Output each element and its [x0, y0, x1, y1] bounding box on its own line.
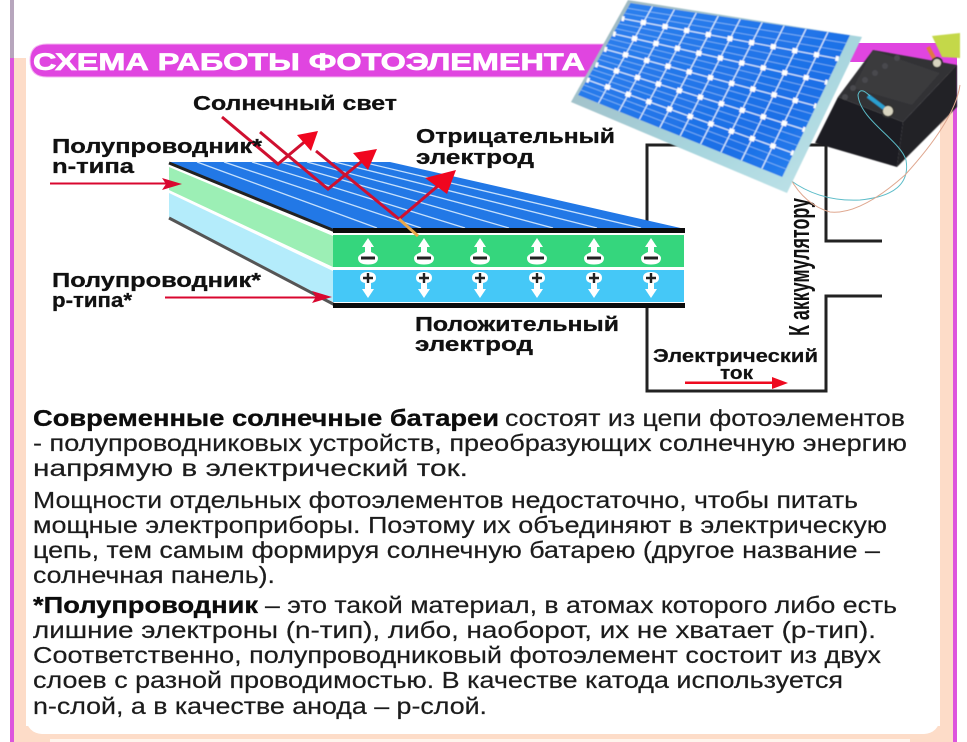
hole charges	[360, 272, 659, 298]
front n-layer	[333, 235, 684, 267]
arrow: n-type pointer	[50, 178, 182, 190]
diagram labels: р-типа*	[52, 290, 132, 312]
ray 3	[316, 151, 456, 236]
text block: modern solar batteries: состоят из цепи фотоэлементов	[505, 405, 905, 431]
cell junction dots	[587, 18, 839, 153]
battery front face	[815, 97, 903, 167]
text block: semiconductor definition: Соответственно, полупроводниковый фотоэлемент состоит из двух	[33, 642, 882, 668]
label: electric current	[653, 346, 818, 383]
diagram labels: электрод	[415, 334, 533, 356]
battery	[815, 33, 960, 167]
solar panel photo	[571, 0, 862, 193]
label: electric current: ток	[720, 363, 754, 383]
cell grid	[587, 6, 839, 169]
diagram labels: Отрицательный	[416, 126, 615, 148]
battery top face	[838, 50, 957, 122]
battery lid plate	[853, 50, 940, 105]
busbars	[581, 8, 846, 169]
text block: panel power: мощные электроприборы. Поэтому их объединяют в электрическую	[33, 512, 887, 538]
text block: semiconductor definition: – это такой материал, в атомах которого либо есть	[265, 592, 897, 618]
text block: modern solar batteries: напрямую в электрический ток.	[33, 455, 468, 481]
text block: panel power	[33, 487, 887, 588]
title banner	[30, 44, 625, 77]
surface stripes	[197, 162, 641, 228]
photocell diagram	[169, 162, 685, 308]
text block: panel power: Мощности отдельных фотоэлементов недостаточно, чтобы питать	[33, 487, 858, 513]
diagram labels: Полупроводник*	[52, 270, 261, 292]
text block: panel power: цепь, тем самым формируя солнечную батарею (другое название –	[33, 537, 880, 563]
label: electric current: Электрический	[653, 346, 818, 366]
label: to battery: К аккумулятору	[784, 198, 816, 336]
side face n-layer	[169, 167, 333, 267]
text block: panel power: солнечная панель).	[33, 562, 275, 588]
battery terminals	[868, 47, 942, 117]
text block: semiconductor definition: *Полупроводник	[33, 592, 259, 618]
text block: semiconductor definition: лишние электроны (n-тип), либо, наоборот, их не хватает (р-тип).	[33, 617, 876, 643]
sunlight rays	[222, 117, 456, 236]
diagram labels: Солнечный свет	[193, 93, 397, 115]
side dark edges	[169, 163, 335, 305]
diagram labels: электрод	[416, 147, 534, 169]
top blue surface	[169, 162, 685, 229]
lid caps	[842, 55, 900, 100]
negative electrode bar	[333, 228, 685, 233]
arrow: p-type pointer	[165, 291, 332, 303]
battery right face	[897, 65, 957, 167]
diagram labels: n-типа	[52, 156, 135, 178]
text block: semiconductor definition: n-слой, а в качестве анода – р-слой.	[33, 693, 487, 719]
front p-layer	[333, 270, 684, 302]
ray 1	[222, 117, 318, 164]
text block: modern solar batteries	[33, 405, 907, 481]
positive electrode bar	[333, 303, 685, 308]
text block: modern solar batteries: - полупроводниковых устройств, преобразующих солнечную энергию	[33, 430, 907, 456]
battery clip	[932, 33, 960, 58]
title banner: СХЕМА РАБОТЫ ФОТОЭЛЕМЕНТА	[33, 49, 585, 76]
diagram labels	[52, 93, 619, 356]
text block: modern solar batteries: Современные солнечные батареи	[33, 405, 499, 431]
ray 2	[260, 132, 377, 189]
text block: semiconductor definition: слоев с разной проводимостью. В качестве катода используется	[33, 667, 843, 693]
side face p-layer	[169, 193, 333, 302]
diagram labels: Положительный	[415, 314, 619, 336]
arrow: current direction	[685, 377, 788, 389]
circuit wires	[647, 145, 882, 391]
electron charges	[358, 238, 661, 264]
text block: semiconductor definition	[33, 592, 897, 719]
battery wires	[790, 85, 960, 212]
panel frame	[571, 0, 862, 193]
diagram labels: Полупроводник*	[52, 136, 262, 158]
panel cells	[578, 3, 850, 177]
